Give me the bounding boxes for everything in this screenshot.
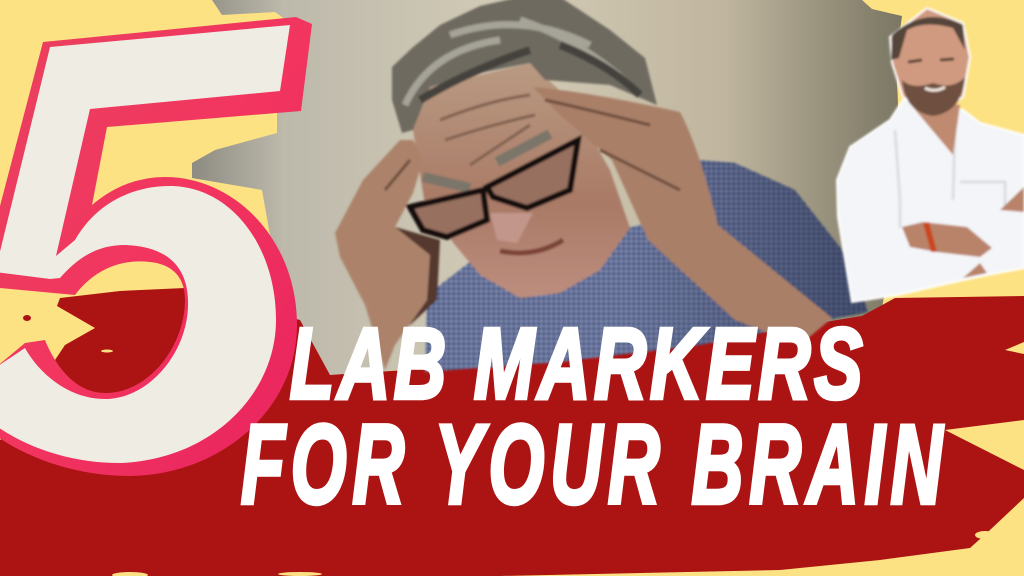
title [241, 308, 944, 527]
title line 1: LAB MARKERS [290, 308, 862, 420]
presenter hair [891, 17, 965, 60]
numeral face [0, 25, 290, 463]
title line 2: FOR YOUR BRAIN [241, 402, 944, 527]
hair highlights [405, 20, 630, 105]
red speck [23, 315, 31, 321]
presenter neck [907, 100, 960, 155]
presenter head [890, 8, 970, 115]
presenter eyes [908, 59, 954, 62]
eyebrows [423, 134, 550, 188]
nose [490, 213, 533, 243]
numeral 5 [0, 17, 312, 476]
hair shadows [420, 45, 640, 100]
paint speckles [101, 350, 995, 576]
presenter photo [837, 8, 1024, 302]
shirt shadow [425, 160, 868, 372]
presenter shirt [837, 100, 1024, 302]
numeral rim [0, 17, 312, 476]
grey hair [392, 0, 657, 133]
finger lines [385, 100, 680, 190]
photo backdrop [192, 0, 902, 380]
photo: older man with headache [335, 0, 868, 372]
shirt shadow [895, 125, 1005, 228]
presenter hand [963, 187, 1024, 278]
left hand and arm [335, 140, 430, 370]
mouth [500, 240, 563, 253]
presenter forearm [902, 222, 992, 257]
glasses [410, 140, 578, 237]
shirt [425, 160, 868, 372]
right hand and arm [533, 87, 832, 345]
forehead wrinkles [440, 95, 535, 165]
presenter beard [902, 77, 965, 116]
red paint area [0, 288, 1024, 576]
dark under left arm [395, 227, 440, 325]
presenter mouth [925, 87, 945, 90]
face [413, 63, 630, 298]
presenter wristband [923, 222, 937, 252]
